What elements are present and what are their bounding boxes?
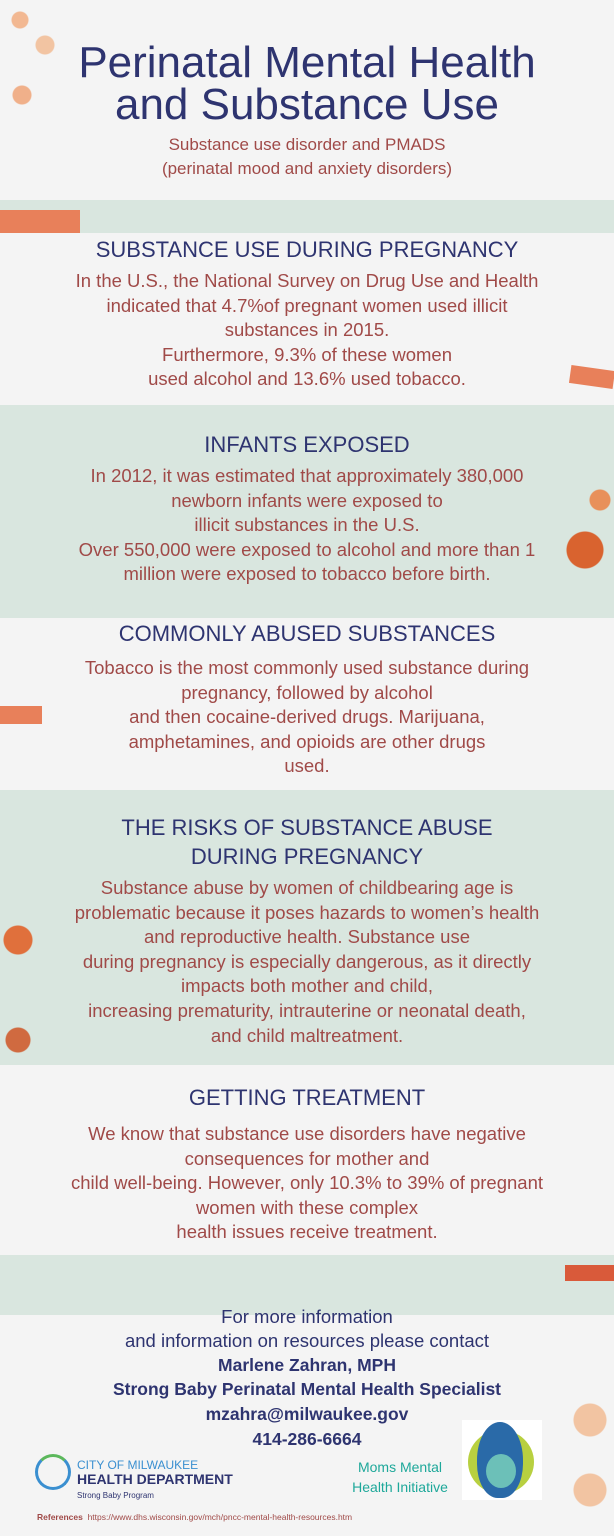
- body: illicit substances in the U.S.: [194, 514, 420, 535]
- decoration: flower right middle: [545, 480, 614, 610]
- body: consequences for mother and: [185, 1148, 429, 1169]
- body: In the U.S., the National Survey on Drug Use and Health: [76, 270, 538, 291]
- contact block: and information on resources please contact: [125, 1330, 489, 1351]
- decoration: flowers left: [0, 920, 50, 1120]
- logo: City of Milwaukee Health Department: Strong Baby Program: [77, 1491, 154, 1500]
- body: [75, 877, 539, 1046]
- body: and child maltreatment.: [211, 1025, 403, 1046]
- body: [85, 657, 529, 776]
- heading: SUBSTANCE USE DURING PREGNANCY: [96, 237, 518, 262]
- body: substances in 2015.: [225, 319, 389, 340]
- heading: DURING PREGNANCY: [191, 844, 423, 869]
- contact block: [113, 1306, 501, 1449]
- body: pregnancy, followed by alcohol: [181, 682, 433, 703]
- body: Over 550,000 were exposed to alcohol and more than 1: [79, 539, 535, 560]
- contact block: Marlene Zahran, MPH: [218, 1355, 396, 1375]
- body: health issues receive treatment.: [176, 1221, 438, 1242]
- heading: INFANTS EXPOSED: [204, 432, 410, 457]
- background band: risks: [0, 790, 614, 1065]
- section: getting treatment: [71, 1085, 543, 1242]
- heading: [121, 815, 493, 869]
- title: and Substance Use: [115, 80, 499, 129]
- icon: mother and child: [462, 1420, 542, 1500]
- section: infants exposed: [79, 432, 535, 584]
- body: newborn infants were exposed to: [171, 490, 443, 511]
- body: Substance abuse by women of childbearing age is: [101, 877, 513, 898]
- decoration: flowers right bottom: [560, 1320, 614, 1536]
- body: [79, 465, 535, 584]
- contact block: 414-286-6664: [252, 1429, 361, 1449]
- title: [78, 38, 536, 129]
- heading: GETTING TREATMENT: [189, 1085, 425, 1110]
- background band: header: [0, 200, 614, 233]
- body: and reproductive health. Substance use: [144, 926, 470, 947]
- decoration: paper right bottom: [565, 1265, 614, 1281]
- section: risks: [75, 815, 539, 1046]
- subtitle: Substance use disorder and PMADS: [169, 135, 445, 154]
- subtitle: [162, 135, 452, 178]
- logo: City of Milwaukee Health Department: HEALTH DEPARTMENT: [77, 1471, 233, 1487]
- background band: infants: [0, 405, 614, 618]
- decoration: paper left: [0, 706, 42, 724]
- logo: Moms Mental Health Initiative: Health Initiative: [352, 1479, 448, 1495]
- icon: mhd circle: [35, 1454, 71, 1490]
- logo: City of Milwaukee Health Department: CITY OF MILWAUKEE: [77, 1458, 198, 1472]
- references: References https://www.dhs.wisconsin.gov/mch/pncc-mental-health-resources.htm: [37, 1512, 352, 1522]
- body: child well-being. However, only 10.3% to 39% of pregnant: [71, 1172, 543, 1193]
- background band: contact: [0, 1255, 614, 1315]
- body: [71, 1123, 543, 1242]
- title: Perinatal Mental Health: [78, 38, 536, 87]
- body: used alcohol and 13.6% used tobacco.: [148, 368, 466, 389]
- logo: Moms Mental Health Initiative: [352, 1459, 448, 1495]
- body: increasing prematurity, intrauterine or neonatal death,: [88, 1000, 526, 1021]
- section: substance use during pregnancy: [76, 237, 538, 389]
- body: and then cocaine-derived drugs. Marijuana,: [129, 706, 485, 727]
- logo: Moms Mental Health Initiative: Moms Mental: [358, 1459, 442, 1475]
- contact block: mzahra@milwaukee.gov: [206, 1404, 408, 1424]
- body: million were exposed to tobacco before birth.: [123, 563, 491, 584]
- decoration: orange flowers top-left: [0, 0, 60, 110]
- body: used.: [284, 755, 330, 776]
- body: In 2012, it was estimated that approximately 380,000: [91, 465, 523, 486]
- contact block: For more information: [221, 1306, 393, 1327]
- decoration: orange paper left: [0, 210, 80, 233]
- body: [76, 270, 538, 389]
- body: problematic because it poses hazards to women’s health: [75, 902, 539, 923]
- heading: THE RISKS OF SUBSTANCE ABUSE: [121, 815, 493, 840]
- body: We know that substance use disorders have negative: [88, 1123, 526, 1144]
- body: Tobacco is the most commonly used substance during: [85, 657, 529, 678]
- section: commonly abused substances: [85, 621, 529, 776]
- decoration: orange paper right: [569, 365, 614, 389]
- heading: COMMONLY ABUSED SUBSTANCES: [119, 621, 495, 646]
- body: during pregnancy is especially dangerous, as it directly: [83, 951, 531, 972]
- logo: City of Milwaukee Health Department: [35, 1454, 233, 1500]
- contact block: Strong Baby Perinatal Mental Health Specialist: [113, 1379, 501, 1399]
- body: indicated that 4.7%of pregnant women used illicit: [106, 295, 508, 316]
- subtitle: (perinatal mood and anxiety disorders): [162, 159, 452, 178]
- body: Furthermore, 9.3% of these women: [162, 344, 452, 365]
- body: amphetamines, and opioids are other drugs: [129, 731, 485, 752]
- body: impacts both mother and child,: [181, 975, 433, 996]
- body: women with these complex: [196, 1197, 418, 1218]
